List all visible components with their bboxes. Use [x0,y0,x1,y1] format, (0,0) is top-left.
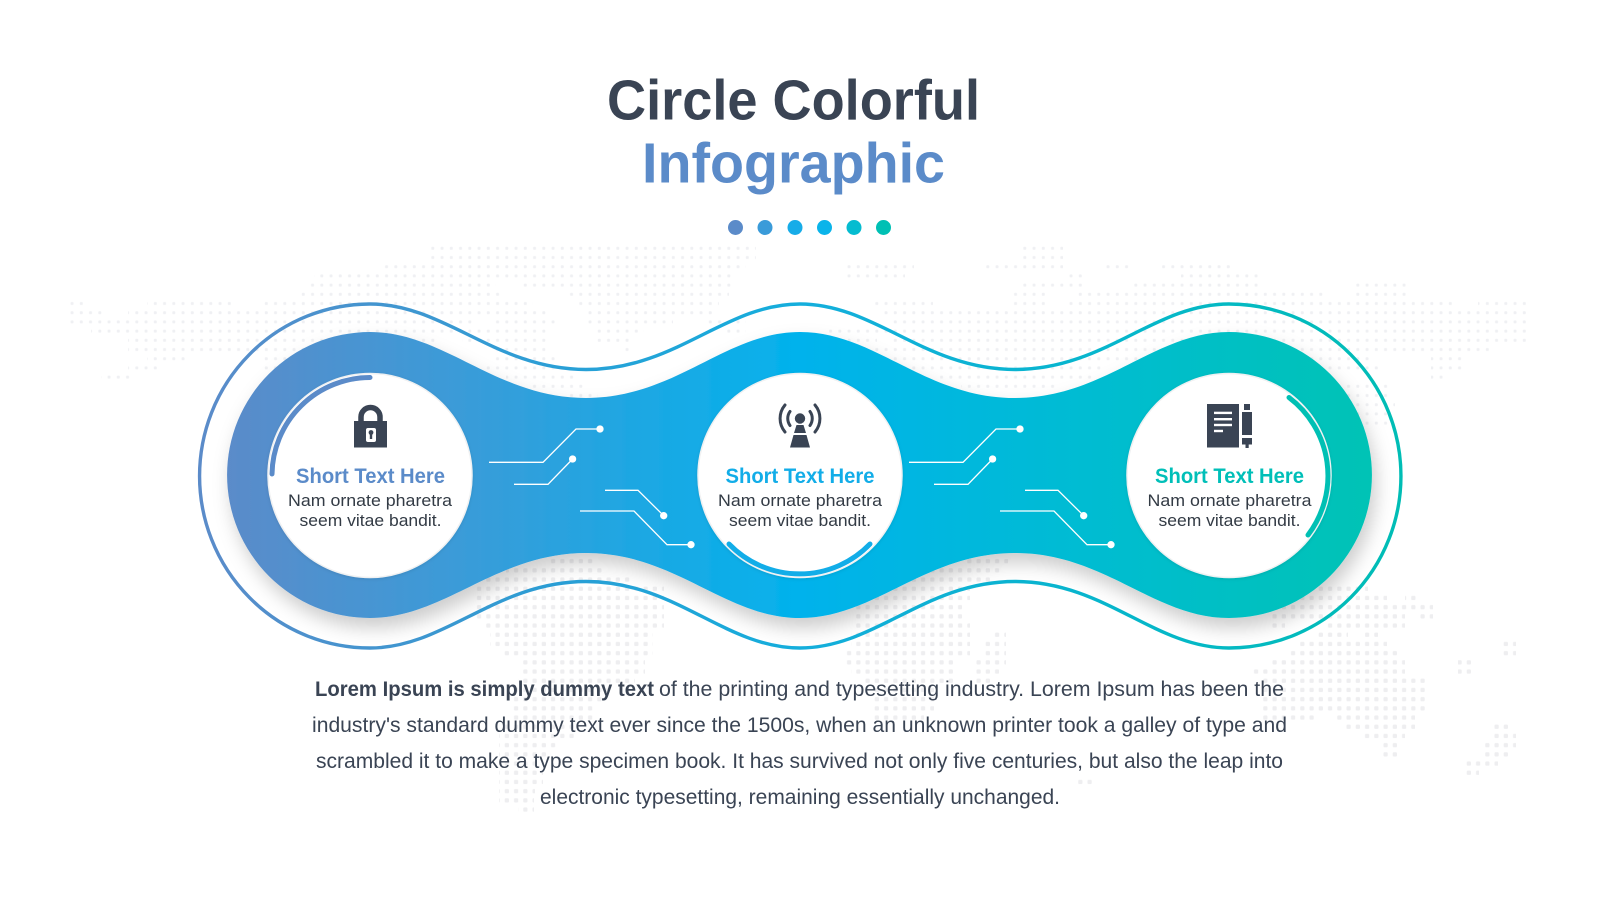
panel: circle 2 [698,374,902,578]
description 3: seem vitae bandit. [1158,511,1300,530]
title line 2: Infographic [642,132,945,196]
heading 1: Short Text Here [296,465,445,488]
description 1: seem vitae bandit. [300,511,442,530]
white disc 1 [268,374,472,578]
title [607,68,980,196]
description 1 [288,491,453,530]
body paragraph: industry's standard dummy text ever since the 1500s, when an unknown printer took a galley of type and [312,714,1287,737]
description 3 [1148,491,1312,530]
white disc 2 [698,374,902,578]
gradient blob [227,332,1372,618]
description 2: seem vitae bandit. [729,511,871,530]
panel: circle 3 [1127,374,1331,578]
body paragraph: scrambled it to make a type specimen book. It has survived not only five centuries, but also the leap into [316,750,1283,773]
heading 3: Short Text Here [1155,465,1304,488]
description 1: Nam ornate pharetra [288,491,453,510]
progress arc 2 [729,544,870,574]
progress arc 1 [272,378,370,474]
decorative title dots [728,220,891,235]
panel: circle 1 [268,374,472,578]
title line 1: Circle Colorful [607,68,980,132]
body paragraph: Lorem Ipsum is simply dummy text [315,678,654,701]
heading 2: Short Text Here [726,465,874,488]
circuit lines right [909,426,1114,548]
icon: padlock [354,408,387,448]
circuit lines left [489,426,694,548]
icon: notebook and pen [1207,404,1252,448]
description 2: Nam ornate pharetra [718,491,883,510]
description 3: Nam ornate pharetra [1148,491,1312,510]
icon: antenna [780,405,820,448]
description 2 [718,491,883,530]
white disc 3 [1127,374,1331,578]
world map dot pattern [68,244,1528,814]
body paragraph [312,678,1287,809]
progress arc 3 [1289,398,1328,535]
outer outline [200,304,1401,648]
body paragraph: electronic typesetting, remaining essentially unchanged. [540,786,1060,809]
body paragraph: of the printing and typesetting industry. Lorem Ipsum has been the [659,678,1284,701]
